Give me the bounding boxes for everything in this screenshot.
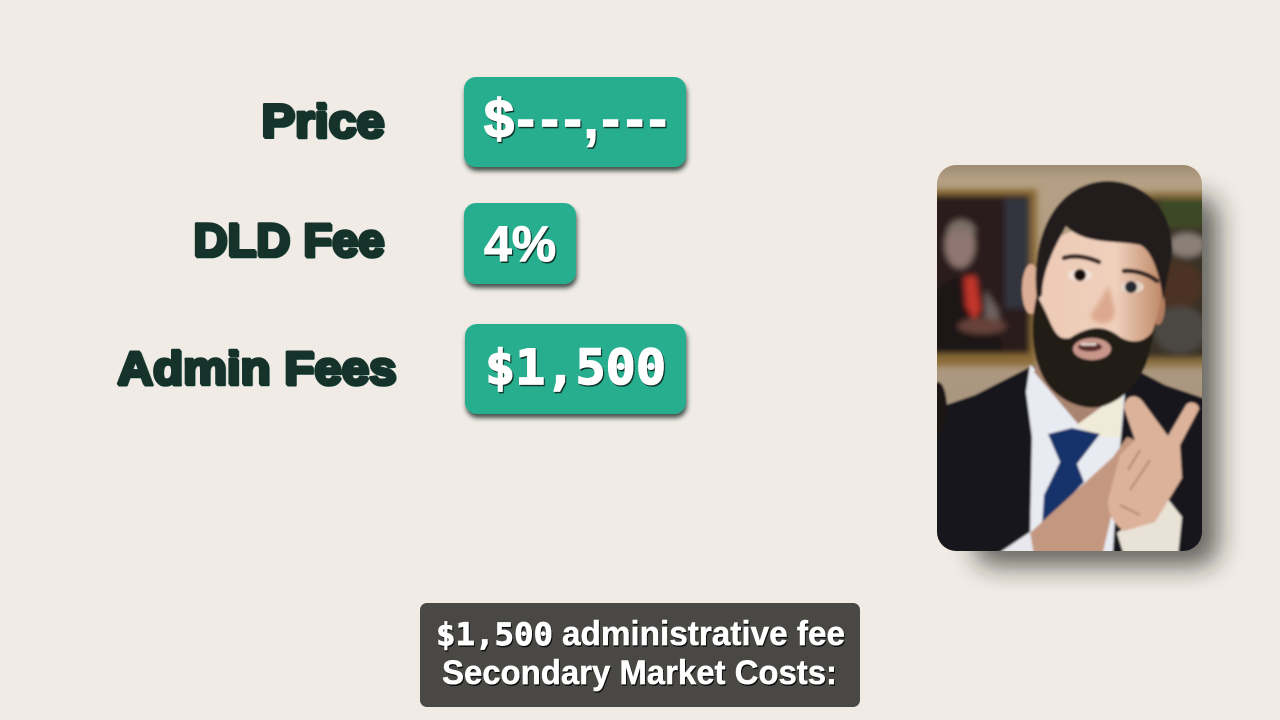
right cuff xyxy=(1116,499,1184,551)
ears xyxy=(1022,264,1040,314)
value badge: price: ---,--- xyxy=(516,86,667,151)
left framed portrait xyxy=(925,189,1037,366)
value badge: DLD fee: 4% xyxy=(484,216,556,272)
mouth xyxy=(1073,338,1111,360)
gesturing hand xyxy=(1108,396,1199,531)
right framed painting xyxy=(1140,188,1202,370)
beard xyxy=(1033,295,1155,408)
caption line 1: administrative fee xyxy=(562,615,845,653)
label: DLD Fee: DLD Fee xyxy=(193,214,384,266)
face xyxy=(1038,230,1163,344)
label: Price: Price xyxy=(261,94,384,146)
left forearm xyxy=(1029,435,1136,551)
shirt xyxy=(1026,365,1125,565)
tie xyxy=(1042,428,1100,527)
label: Admin Fees: Admin Fees xyxy=(117,342,396,394)
caption box xyxy=(420,603,860,707)
neck xyxy=(1033,366,1102,425)
eyes xyxy=(1068,269,1092,281)
value badge: admin fees: $1,500 xyxy=(485,340,666,396)
value badge: price xyxy=(464,77,686,167)
caption line 1: $1,500 xyxy=(436,617,553,653)
nose xyxy=(1090,285,1115,323)
suit xyxy=(937,366,1202,551)
value badge: admin fees xyxy=(465,324,686,414)
hair xyxy=(1036,181,1172,300)
caption line 2: Secondary Market Costs: xyxy=(442,654,837,692)
caption line 1 xyxy=(436,615,845,653)
presenter photo card xyxy=(925,155,1220,566)
eyebrows xyxy=(1064,256,1157,281)
value badge: DLD fee xyxy=(464,203,576,284)
left cuff xyxy=(998,530,1035,551)
value badge: price: $ xyxy=(484,89,514,149)
